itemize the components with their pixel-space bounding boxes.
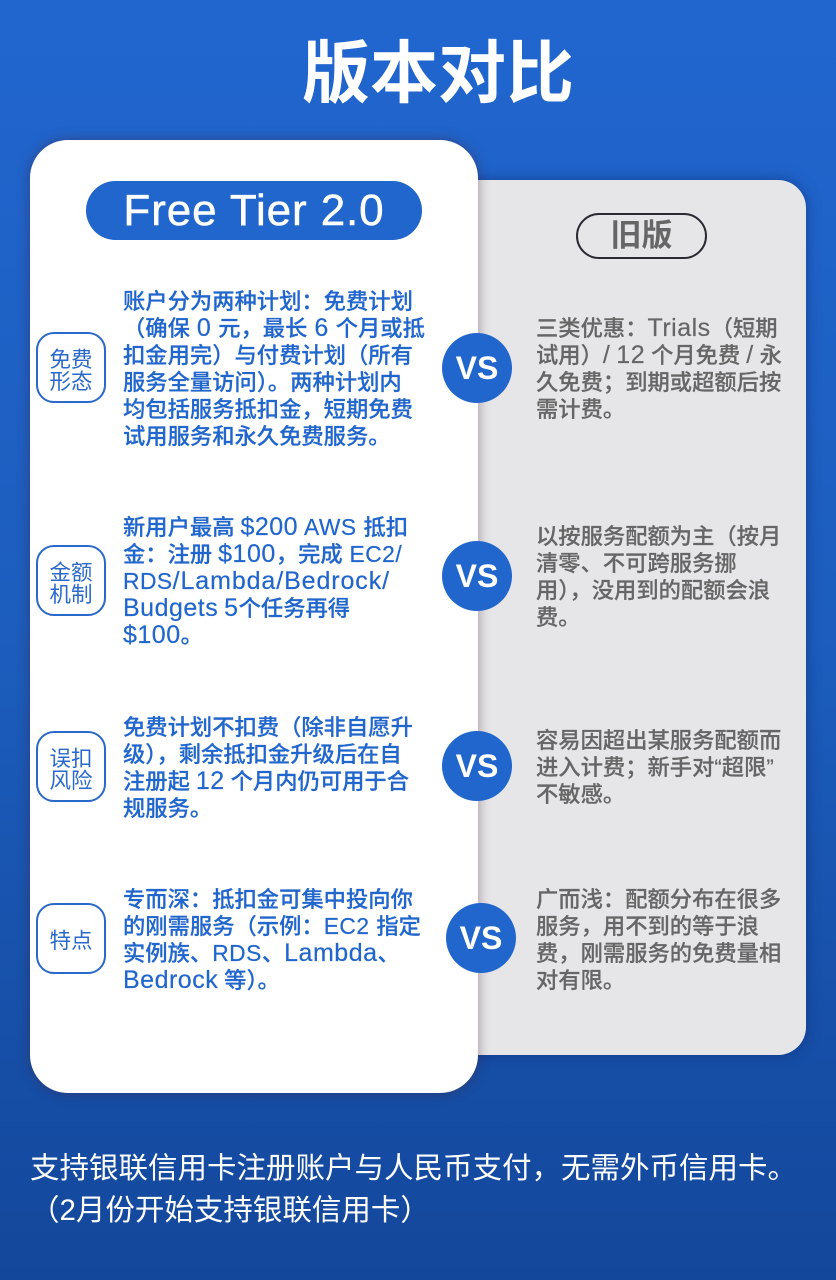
text: features, new version: Bedrock 等）。 — [123, 966, 280, 994]
text: features, new version: 的刚需服务（示例：EC2 指定 — [123, 913, 421, 939]
vs badge 4: VS — [460, 920, 502, 956]
text: risk, new version: 规服务。 — [123, 796, 212, 821]
heading pill: Free Tier 2.0: Free Tier 2.0 — [123, 186, 385, 235]
text: amount mechanism, old version — [536, 524, 781, 630]
tag: accidental charge risk: 误扣 — [49, 747, 92, 771]
tag: free form — [36, 332, 106, 403]
text: features, new version: 实例族、RDS、Lambda、 — [123, 939, 400, 967]
footer note — [30, 1152, 797, 1227]
text: free form, new version: 扣金用完）与付费计划（所有 — [123, 343, 413, 368]
tag: features — [36, 903, 106, 974]
footer note: （2月份开始支持银联信用卡） — [30, 1194, 430, 1227]
text: free form, new version — [123, 289, 425, 449]
text: free form, old version: 三类优惠：Trials（短期 — [536, 314, 778, 342]
vs badge 1 — [442, 333, 512, 403]
tag: amount mechanism — [36, 545, 106, 616]
text: amount mechanism, new version: Budgets 5个任务再得 — [123, 594, 350, 622]
text: features, old version: 对有限。 — [536, 968, 625, 993]
text: free form, new version: 试用服务和永久免费服务。 — [123, 424, 391, 449]
text: free form, new version: 服务全量访问）。两种计划内 — [123, 370, 402, 395]
text: risk, old version: 不敏感。 — [536, 782, 625, 807]
vs badge 2: VS — [456, 558, 498, 594]
text: free form, old version: 久免费；到期或超额后按 — [536, 370, 781, 395]
text: features, old version: 服务，用不到的等于浪 — [536, 914, 759, 939]
text: amount mechanism, new version — [123, 513, 408, 649]
text: amount mechanism, old version: 清零、不可跨服务挪 — [536, 551, 737, 576]
text: free form, old version: 试用）/ 12 个月免费 / 永 — [536, 341, 782, 369]
text: free form, old version: 需计费。 — [536, 397, 625, 422]
heading pill: old version: 旧版 — [610, 218, 672, 253]
title: 版本对比 — [302, 36, 574, 112]
text: features, old version — [536, 887, 781, 993]
text: features, new version — [123, 887, 421, 994]
text: amount mechanism, new version: RDS/Lambda/Bedrock/ — [123, 567, 390, 595]
tag: amount mechanism: 金额 — [49, 561, 92, 585]
vs badge 1: VS — [456, 350, 498, 386]
tag: free form: 免费 — [49, 348, 92, 372]
text: free form, new version: （确保 0 元，最长 6 个月或抵 — [123, 314, 425, 342]
vs badge 2 — [442, 541, 512, 611]
tag: amount mechanism: 机制 — [49, 583, 92, 607]
tag: accidental charge risk: 风险 — [49, 769, 92, 793]
text: risk, old version: 进入计费；新手对“超限” — [536, 755, 774, 780]
heading pill: Free Tier 2.0 — [86, 181, 422, 240]
tag: accidental charge risk — [36, 731, 106, 802]
vs badge 4 — [446, 903, 516, 973]
text: risk, old version — [536, 728, 781, 807]
text: free form, new version: 均包括服务抵扣金，短期免费 — [123, 397, 413, 422]
text: risk, new version: 注册起 12 个月内仍可用于合 — [123, 767, 409, 795]
text: free form, old version — [536, 314, 782, 422]
panel: old version — [440, 180, 806, 1055]
panel: Free Tier 2.0 — [30, 140, 478, 1093]
text: amount mechanism, old version: 以按服务配额为主（按月 — [536, 524, 781, 549]
text: amount mechanism, old version: 用），没用到的配额会浪 — [536, 578, 770, 603]
footer note: 支持银联信用卡注册账户与人民币支付，无需外币信用卡。 — [30, 1152, 797, 1185]
text: risk, new version: 级），剩余抵扣金升级后在自 — [123, 742, 402, 767]
text: risk, old version: 容易因超出某服务配额而 — [536, 728, 781, 753]
tag: free form: 形态 — [49, 370, 92, 394]
text: features, old version: 费，刚需服务的免费量相 — [536, 941, 781, 966]
text: amount mechanism, new version: $100。 — [123, 621, 203, 649]
text: amount mechanism, new version: 金：注册 $100，完成 EC2/ — [123, 540, 402, 568]
text: risk, new version — [123, 715, 413, 821]
text: amount mechanism, old version: 费。 — [536, 605, 581, 630]
text: risk, new version: 免费计划不扣费（除非自愿升 — [123, 715, 413, 740]
text: features, old version: 广而浅：配额分布在很多 — [536, 887, 781, 912]
heading pill: old version — [576, 213, 707, 259]
vs badge 3: VS — [456, 748, 498, 784]
tag: features: 特点 — [49, 929, 92, 953]
vs badge 3 — [442, 731, 512, 801]
text: free form, new version: 账户分为两种计划：免费计划 — [123, 289, 413, 314]
text: amount mechanism, new version: 新用户最高 $200 AWS 抵扣 — [123, 513, 408, 541]
text: features, new version: 专而深：抵扣金可集中投向你 — [123, 887, 413, 912]
